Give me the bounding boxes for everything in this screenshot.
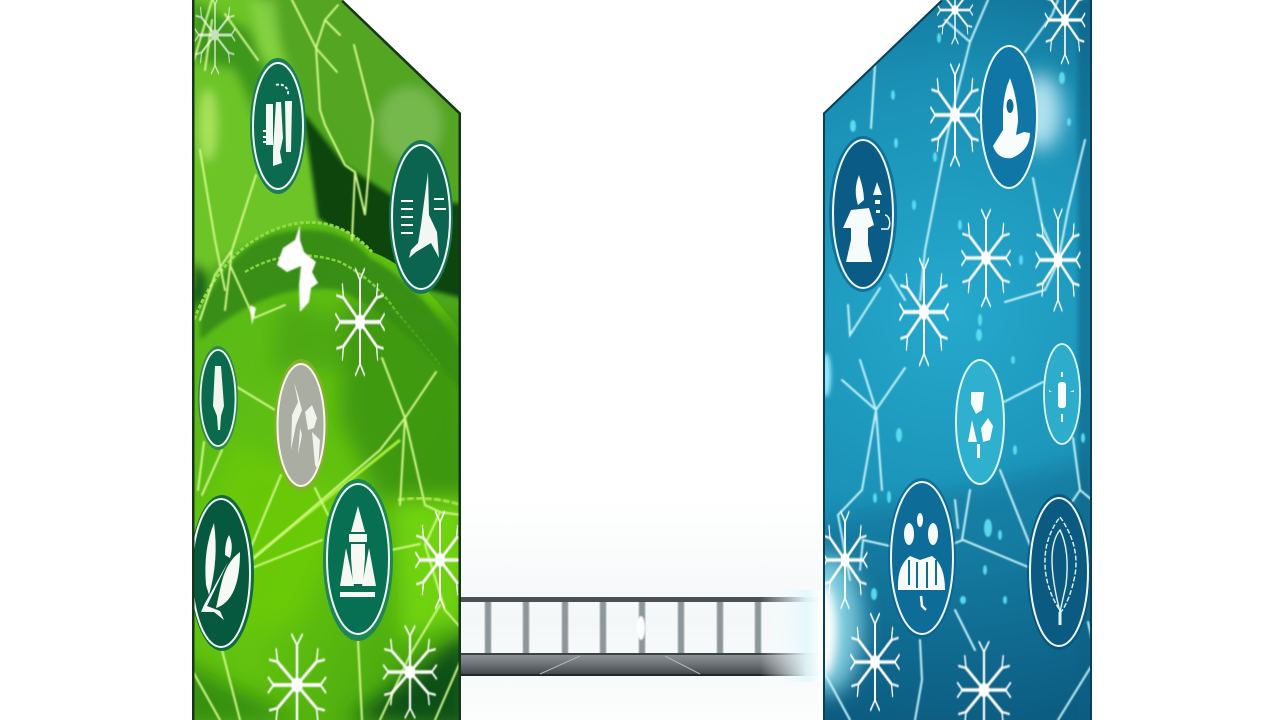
blue neuron: left edge — [823, 512, 867, 608]
bridge top rail — [461, 597, 823, 602]
blue background — [823, 0, 1093, 720]
green panel edge — [192, 0, 461, 720]
network lines — [192, 0, 461, 720]
white neuron: right edge — [416, 512, 464, 608]
infographic scene — [192, 0, 1092, 720]
icon — [968, 392, 993, 458]
leaf background — [180, 0, 470, 720]
blue neuron: bottom left — [851, 614, 899, 710]
icon — [993, 78, 1030, 158]
blue neuron: upper centre — [931, 65, 979, 165]
icon — [340, 506, 376, 597]
icon cutouts — [909, 560, 936, 588]
glow: bottom-left bloom — [825, 544, 875, 706]
badge: blue 1 person — [829, 136, 897, 292]
badge: blue 6 drop outline — [1027, 494, 1091, 650]
glow: left edge — [821, 353, 831, 397]
badge: green 4 grey — [274, 359, 328, 491]
bridge fade into blue panel — [760, 590, 823, 682]
background haze — [461, 500, 823, 720]
blue panel edge — [823, 0, 1092, 720]
blue network lines — [823, 0, 1092, 720]
blue neuron: lower left — [900, 259, 948, 365]
bridge posts — [485, 601, 761, 655]
badge: blue 5 people group — [888, 478, 956, 638]
white neuron: bottom right — [384, 626, 436, 718]
panel: green leaf — [180, 0, 470, 720]
icon — [263, 84, 292, 166]
icon — [1049, 372, 1074, 422]
white neuron: centre — [336, 269, 384, 375]
white neuron: bottom centre — [268, 635, 326, 720]
badge: green 6 pyramid — [323, 479, 393, 641]
white neuron: top left — [195, 0, 235, 73]
icon — [291, 382, 320, 470]
badge: green 3 ladder — [198, 346, 238, 450]
blue neuron: right — [1036, 210, 1080, 310]
icon — [1045, 517, 1076, 625]
light particles — [850, 33, 1085, 604]
icon — [401, 172, 446, 258]
bridge deck — [461, 653, 823, 676]
bridge glare — [637, 616, 645, 640]
badge: green 2 figure — [389, 140, 453, 294]
blue neuron: bottom centre — [958, 642, 1010, 720]
badge: green 5 leaves — [190, 495, 254, 651]
badge: blue 2 flame in hand — [981, 46, 1037, 188]
panel: blue network — [823, 0, 1092, 720]
icon detail — [1006, 99, 1014, 113]
blue neuron: middle — [962, 210, 1010, 306]
badge: blue 4 bulb — [1044, 344, 1080, 444]
white neuron: upper left cluster — [250, 225, 318, 325]
bridge — [461, 590, 823, 682]
icon — [201, 523, 240, 620]
icon — [843, 175, 890, 262]
badge: blue 3 flowers — [956, 360, 1004, 484]
glow: bright bloom near top badge — [1018, 74, 1062, 150]
blue neuron: top right — [1045, 0, 1085, 63]
blue neuron: top — [937, 0, 973, 44]
badge: green 1 figures — [250, 58, 306, 194]
icon detail — [921, 596, 926, 610]
icon — [898, 513, 945, 590]
icon — [213, 366, 224, 430]
